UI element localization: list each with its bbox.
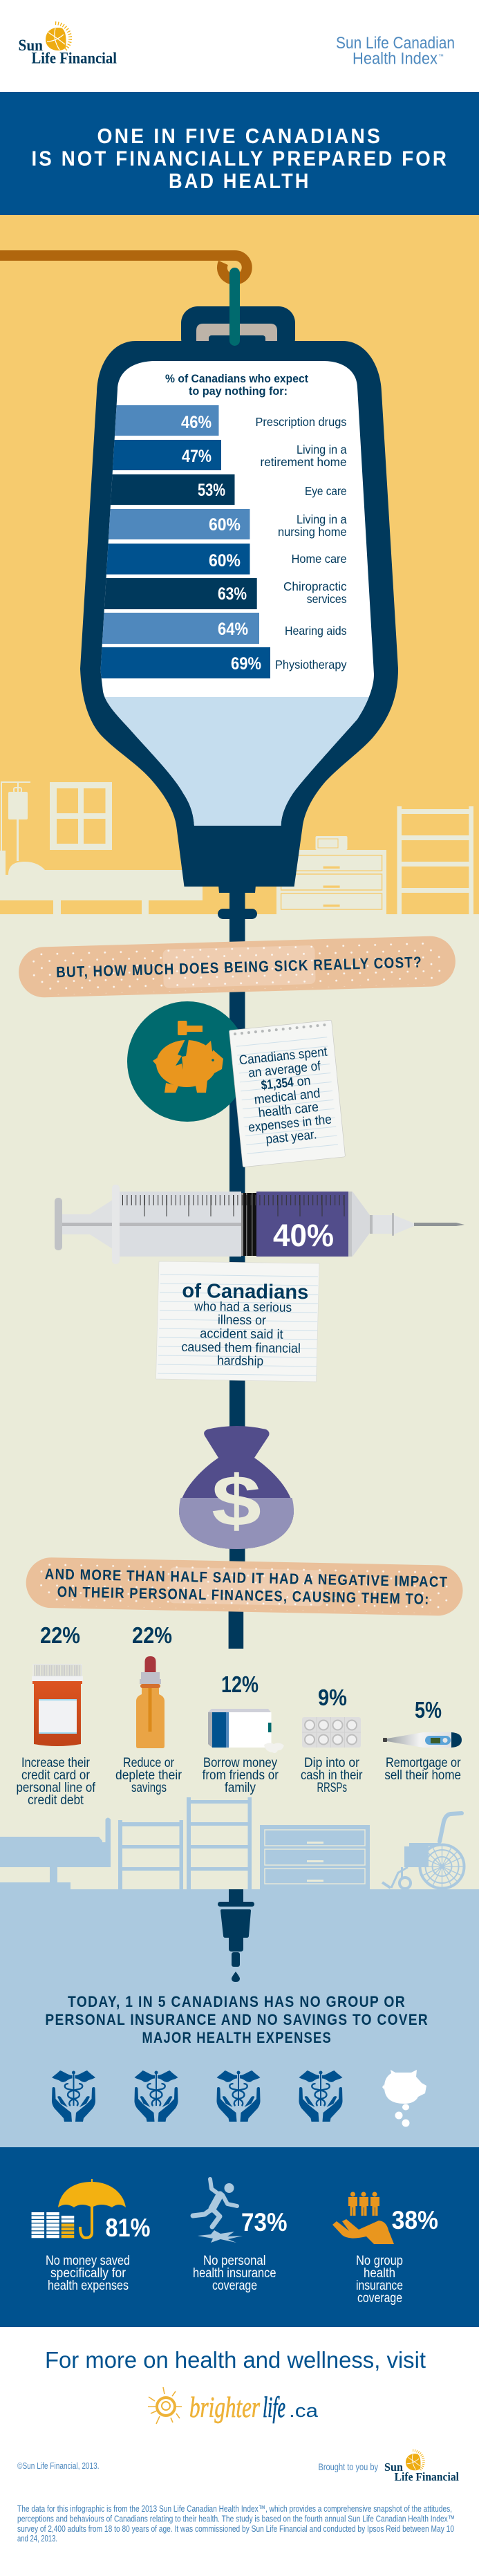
description: insurance [356,2279,403,2293]
bar labels: Living in a [297,512,347,526]
title band [0,92,479,215]
description [384,1756,461,1783]
bar labels [256,415,347,671]
icon: dropper bottle [136,1656,165,1748]
icon: hand holding people [332,2192,394,2244]
panel: stats band [0,2147,479,2327]
note text: of Canadians [182,1280,309,1304]
stat column: home [383,1697,462,1783]
icon: caduceus hands [299,2070,343,2122]
bar labels: services [307,592,347,606]
bar values: 64% [218,620,248,639]
description: health [364,2266,395,2281]
description: No personal [203,2254,265,2268]
note text: medical and [254,1086,321,1107]
description: specifically for [50,2266,126,2281]
IV tube [229,889,245,1580]
note text: on [296,1073,311,1089]
chart heading [165,372,308,398]
description [46,2254,130,2293]
heading: 1 in 5 Canadians: PERSONAL INSURANCE AND NO SAVINGS TO COVER [45,2011,429,2028]
Sun Life Canadian Health Index wordmark [336,34,455,68]
stat value: 81% [105,2214,151,2242]
icon: wheelchair [382,1813,464,1889]
note: average spend [229,1020,346,1167]
logo: Sun Life Financial [384,2450,459,2483]
stat column: borrow money [203,1671,284,1795]
bar labels: Eye care [305,484,347,498]
icon: drop [232,1972,240,1982]
logo: brighterlife.ca [148,2387,319,2424]
icon row: 4 insured, 1 saved [52,2070,426,2127]
bar labels: nursing home [278,525,347,539]
bar values: 60% [209,551,241,571]
description: health insurance [193,2266,276,2281]
chart heading: % of Canadians who expect [165,372,308,385]
copyright: ©Sun Life Financial, 2013. [17,2461,100,2471]
note text: past year. [265,1127,317,1147]
heading: 1 in 5 Canadians: TODAY, 1 IN 5 CANADIANS HAS NO GROUP OR [68,1993,406,2010]
stat column: credit debt [17,1622,96,1808]
Sun Life Canadian Health Index wordmark: Health Index [353,50,438,68]
logo: Sun Life Financial: Sun [18,37,43,54]
description: RRSPs [317,1781,347,1795]
note: 40% of Canadians [156,1261,319,1382]
bar values: 46% [181,413,212,432]
description: Reduce or [123,1756,175,1770]
bar values: 47% [182,447,212,466]
disclaimer [17,2503,455,2543]
IV tube lower section [229,1577,243,1649]
note text: expenses in the [247,1113,332,1136]
description: No group [356,2254,403,2268]
title: BAD HEALTH [169,169,311,193]
description: Remortgage or [386,1756,461,1770]
stat value: 5% [415,1697,442,1723]
bar labels: Living in a [297,443,347,456]
icon: white piggy bank with coins [382,2070,426,2127]
icon: thermometer [383,1732,462,1748]
icon: caduceus hands [134,2070,178,2122]
description [203,1756,279,1795]
logo: Sun Life Financial [18,24,117,66]
icon: coins and umbrella [38,2179,126,2239]
description: sell their home [384,1768,461,1783]
description: health expenses [48,2279,129,2293]
chart heading: to pay nothing for: [189,384,288,398]
description [17,1756,96,1808]
disclaimer: and 24, 2013. [17,2533,57,2543]
heading: 1 in 5 Canadians: MAJOR HEALTH EXPENSES [142,2029,332,2046]
bandage banner: negative impact [26,1557,463,1616]
description: deplete their [115,1768,182,1783]
icon: money bag [179,1426,294,1549]
bar values [181,413,261,674]
description: coverage [357,2291,402,2306]
bar values: 69% [231,654,261,674]
description: from friends or [203,1768,279,1783]
background room: bed, shelves, cabinet, wheelchair [0,1797,464,1889]
bar labels: Hearing aids [285,624,347,638]
brought to you by [318,2450,459,2483]
description: Borrow money [203,1756,277,1770]
bar labels: Chiropractic [283,580,347,593]
title [32,124,449,193]
note text: health care [258,1100,319,1120]
logo: Sun Life Financial: Sun [384,2461,404,2474]
stat column: savings [115,1622,182,1795]
icon: broken piggy bank [127,1001,247,1122]
note text [181,1280,309,1369]
description: Increase their [21,1756,91,1770]
logo: brighterlife.ca: .ca [289,2400,319,2421]
IV bag [69,268,415,919]
hanging strap [229,268,240,346]
bar labels: Physiotherapy [275,658,347,671]
40% value: 40% [273,1218,334,1253]
icon: blister pack [302,1717,361,1748]
bandage banner: how much does being sick cost [18,936,456,998]
icon: pill bottle [32,1665,83,1746]
description: coverage [212,2279,257,2293]
banner text: BUT, HOW MUCH DOES BEING SICK REALLY COST? [56,954,422,981]
bars [101,405,270,678]
stat value: 12% [221,1671,259,1697]
syringe [55,1185,464,1264]
icon: falling person [193,2179,243,2243]
stat column: RRSPs [301,1685,363,1795]
bag inner [101,361,374,826]
description: savings [131,1781,167,1795]
stat: no personal insurance [193,2179,288,2293]
icon: sun [148,2387,182,2424]
icon: caduceus hands [217,2070,260,2122]
description: personal line of [17,1781,96,1795]
description: credit card or [21,1768,91,1783]
bar values: 60% [209,515,241,535]
bag connector [218,885,257,919]
note text: Canadians spent [238,1045,328,1068]
IV hook [0,256,247,279]
note text [238,1045,337,1149]
Sun Life Canadian Health Index wordmark: Sun Life Canadian [336,34,455,53]
note text: accident said it [200,1326,283,1342]
stat: no group insurance [332,2192,438,2306]
Sun Life Canadian Health Index wordmark: ™ [438,53,444,59]
stat value: 73% [241,2208,288,2236]
description: credit debt [28,1793,84,1808]
IV drip end [218,1889,254,1982]
logo: Sun Life Financial: Life Financial [395,2470,459,2483]
stat: no money saved [38,2179,150,2293]
note text: $1,354 [261,1075,294,1093]
stat value: 9% [318,1685,347,1710]
bar labels: Home care [292,552,347,566]
description: cash in their [301,1768,363,1783]
background room: IV stand, bed, window, cabinet, shelf [0,781,473,914]
note text: who had a serious [194,1299,292,1315]
icon: caduceus hands [52,2070,95,2122]
logo: brighterlife.ca: life [263,2392,285,2424]
description: No money saved [46,2254,130,2268]
stat value: 22% [40,1622,80,1648]
logo: brighterlife.ca: brighter [189,2392,260,2424]
description [115,1756,182,1795]
description [301,1756,363,1795]
bar values: 63% [218,584,247,604]
note text: an average of [247,1059,322,1081]
note text: illness or [218,1313,267,1328]
bar values: 53% [198,481,225,500]
brought to you by: Brought to you by [318,2461,378,2472]
bag outline [80,341,398,887]
bar labels: Prescription drugs [256,415,347,429]
bag tab [181,306,295,360]
description: Dip into or [304,1756,360,1770]
bar chart [101,405,347,678]
note text: caused them financial [181,1340,301,1356]
stat value: 22% [132,1622,172,1648]
call to action: For more on health and wellness, visit [45,2347,426,2373]
description: family [225,1781,256,1795]
note text: hardship [217,1354,263,1369]
description [356,2254,403,2306]
bar labels: retirement home [260,455,347,469]
plunger seal [241,1193,256,1256]
title: ONE IN FIVE CANADIANS [97,124,382,148]
stat value: 38% [392,2206,438,2234]
description [193,2254,276,2293]
icon: money bag: $ [212,1461,261,1541]
icon: medicine box [208,1709,284,1753]
heading: 1 in 5 Canadians [45,1993,429,2046]
banner text [44,1566,449,1608]
logo: Sun Life Financial: Life Financial [32,50,117,66]
